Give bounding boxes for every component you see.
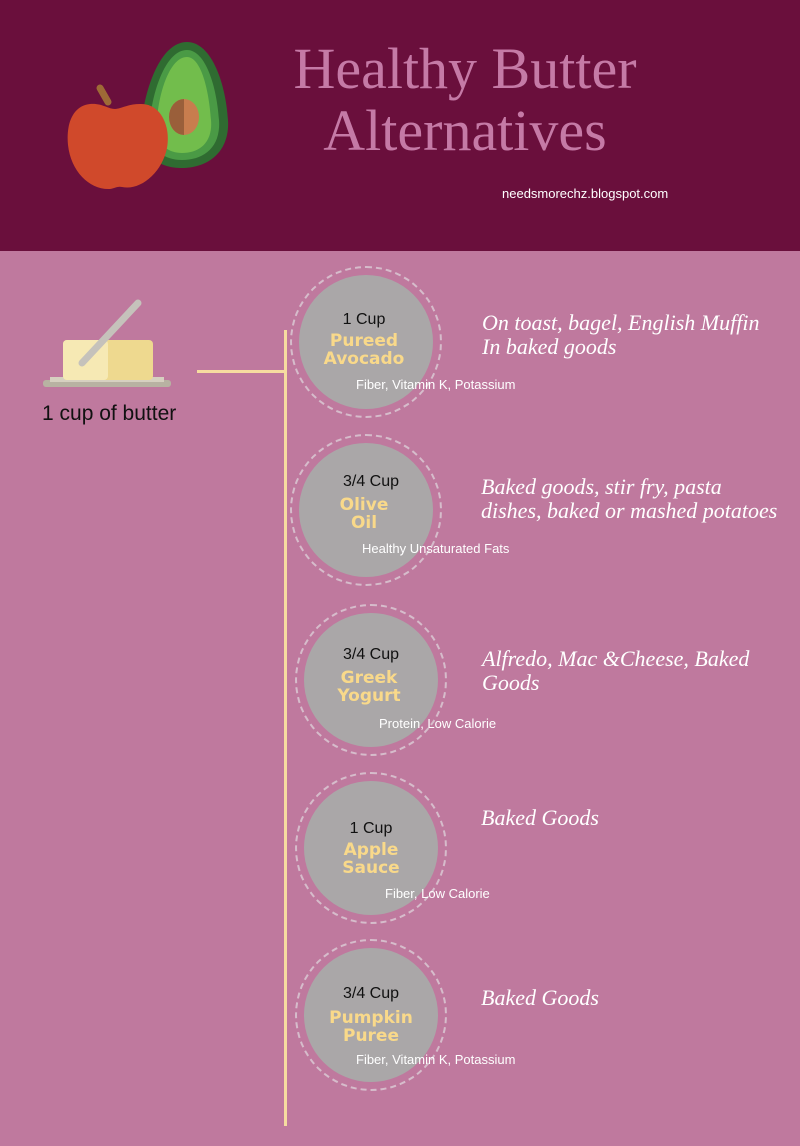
text: Fiber, Vitamin K, Potassium — [356, 377, 515, 392]
text: Sauce — [342, 858, 400, 878]
text: Alfredo, Mac &Cheese, Baked — [482, 646, 749, 671]
icon: avocado and apple — [68, 42, 228, 189]
header band — [0, 0, 800, 251]
label: 1 cup of butter: 1 cup of butter — [42, 402, 176, 425]
text: Goods — [482, 670, 539, 695]
text: Baked Goods — [481, 805, 599, 830]
text: 1 Cup — [350, 820, 392, 837]
text: Pureed — [330, 331, 398, 351]
title — [293, 36, 637, 163]
text: Pumpkin — [329, 1008, 413, 1028]
text: Avocado — [324, 349, 404, 369]
text: 3/4 Cup — [343, 985, 399, 1002]
text: In baked goods — [482, 334, 616, 359]
item: pumpkin puree — [295, 939, 599, 1091]
text: Oil — [351, 513, 377, 533]
text: Fiber, Vitamin K, Potassium — [356, 1052, 515, 1067]
icon: butter — [43, 300, 171, 387]
text: Baked goods, stir fry, pasta — [481, 474, 722, 499]
text: Healthy Unsaturated Fats — [362, 541, 509, 556]
title: Alternatives — [323, 98, 607, 163]
text: Fiber, Low Calorie — [385, 886, 490, 901]
item: greek yogurt — [295, 604, 750, 756]
source url: needsmorechz.blogspot.com — [502, 186, 668, 201]
text: On toast, bagel, English Muffin — [482, 310, 759, 335]
text: Apple — [344, 840, 398, 860]
connector lines — [197, 370, 287, 373]
text: dishes, baked or mashed potatoes — [481, 498, 777, 523]
item: olive oil — [290, 434, 777, 586]
text: Greek — [341, 668, 397, 688]
item: avocado — [290, 266, 759, 418]
text: 1 Cup — [343, 311, 385, 328]
text: Olive — [340, 495, 388, 515]
text: Protein, Low Calorie — [379, 716, 496, 731]
item: apple sauce — [295, 772, 599, 924]
text: Yogurt — [337, 686, 401, 706]
text: 3/4 Cup — [343, 646, 399, 663]
title: Healthy Butter — [293, 36, 637, 101]
text: Puree — [343, 1026, 399, 1046]
text: Baked Goods — [481, 985, 599, 1010]
text: 3/4 Cup — [343, 473, 399, 490]
